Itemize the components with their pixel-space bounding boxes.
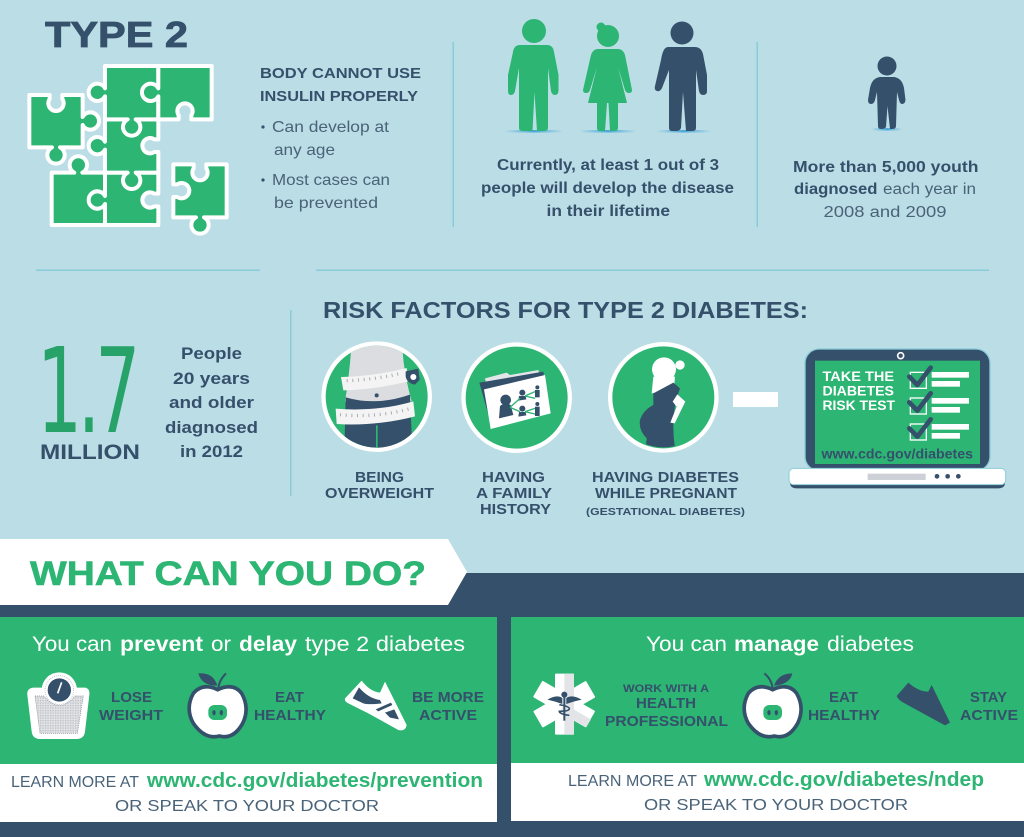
text: people 20 years and older: People: [181, 344, 242, 363]
text: learn more ndep: [568, 769, 984, 814]
icon: scale: [27, 672, 89, 739]
label: eat healthy: [808, 689, 880, 724]
text: one out of three: in their lifetime: [546, 203, 670, 220]
label: lose weight: WEIGHT: [99, 707, 163, 724]
labels: risk factor captions: HISTORY: [480, 502, 551, 518]
text: body cannot use insulin properly: be prevented: [274, 195, 378, 212]
icon: child: [868, 56, 906, 130]
title: type 2: TYPE 2: [45, 14, 188, 55]
panel heading: manage: You can: [646, 633, 727, 656]
text: learn more prevention: LEARN MORE AT: [11, 774, 140, 791]
label: eat healthy: EAT: [275, 689, 304, 706]
icon: laptop risk test: www.cdc.gov/diabetes: [820, 446, 973, 462]
icon: three people: [505, 19, 711, 132]
text: body cannot use insulin properly: Can develop at: [272, 119, 390, 136]
text: body cannot use insulin properly: INSULIN PROPERLY: [260, 88, 418, 105]
labels: risk factor captions: A FAMILY: [476, 486, 552, 502]
label: eat healthy: HEALTHY: [808, 707, 880, 724]
text: youth diagnosed: each year in: [883, 181, 976, 198]
label: be more active: [412, 689, 484, 724]
label: stay active: [960, 689, 1018, 724]
label: eat healthy: EAT: [829, 689, 858, 706]
icon: dark shoe: [897, 683, 950, 725]
labels: risk factor captions: BEING: [355, 470, 404, 486]
labels: risk factor captions: HAVING: [482, 470, 545, 486]
text: youth diagnosed: [793, 159, 978, 221]
text: body cannot use insulin properly: any age: [274, 142, 335, 159]
panel heading: manage: diabetes: [827, 633, 914, 656]
text: body cannot use insulin properly: [260, 65, 421, 212]
icon: pregnant woman: [608, 342, 719, 453]
label: be more active: ACTIVE: [419, 707, 477, 724]
text: one out of three: [481, 157, 734, 220]
icon: overweight: [321, 341, 432, 452]
icon: star of life: [533, 674, 595, 735]
icon: family history: [461, 342, 572, 453]
icon: minus connector: [733, 392, 778, 407]
text: people 20 years and older: and older: [169, 393, 254, 412]
text: one out of three: people will develop the disease: [481, 180, 734, 197]
panel heading: prevent: [32, 633, 465, 656]
text: people 20 years and older: diagnosed: [165, 418, 258, 437]
icon: laptop risk test: RISK TEST: [822, 398, 896, 413]
panel heading: prevent: delay: [239, 633, 297, 656]
text: youth diagnosed: diagnosed: [794, 181, 878, 198]
text: people 20 years and older: [165, 344, 258, 461]
banner: what can you do: [0, 539, 467, 605]
text: body cannot use insulin properly: BODY CANNOT USE: [260, 65, 421, 82]
text: youth diagnosed: 2008 and 2009: [824, 204, 946, 221]
icon: shoe: [345, 681, 407, 730]
text: one out of three: Currently, at least 1 out of 3: [497, 157, 719, 174]
label: work with a health professional: [605, 683, 728, 730]
label: work with a health professional: HEALTH: [636, 695, 696, 712]
labels: risk factor captions: [325, 470, 745, 518]
text: learn more prevention: [11, 770, 483, 815]
banner: what can you do: WHAT CAN YOU DO?: [30, 555, 426, 593]
labels: risk factor captions: (GESTATIONAL DIABETES): [586, 507, 745, 518]
icon: laptop risk test: DIABETES: [822, 384, 894, 398]
text: body cannot use insulin properly: Most cases can: [272, 172, 390, 189]
icon: puzzle pieces: [29, 66, 227, 234]
stat: 1.7 million: MILLION: [40, 441, 140, 464]
icon: apple: [744, 673, 801, 737]
label: stay active: ACTIVE: [960, 707, 1018, 724]
panel: manage: [511, 617, 1024, 821]
text: people 20 years and older: 20 years: [173, 369, 250, 388]
label: eat healthy: HEALTHY: [254, 707, 326, 724]
panel heading: prevent: You can: [32, 633, 112, 656]
label: stay active: STAY: [970, 689, 1007, 706]
icon: laptop risk test: [789, 349, 1006, 488]
heading: risk factors: RISK FACTORS FOR TYPE 2 DIABETES:: [323, 297, 808, 323]
label: eat healthy: [254, 689, 326, 724]
text: learn more ndep: www.cdc.gov/diabetes/ndep: [703, 769, 984, 791]
label: be more active: BE MORE: [412, 689, 484, 706]
text: learn more ndep: OR SPEAK TO YOUR DOCTOR: [644, 797, 908, 814]
panel heading: prevent: type 2 diabetes: [305, 633, 465, 656]
text: youth diagnosed: More than 5,000 youth: [793, 159, 978, 176]
panel heading: prevent: prevent: [120, 633, 203, 656]
icon: apple: [189, 673, 246, 737]
text: learn more ndep: LEARN MORE AT: [568, 773, 698, 790]
labels: risk factor captions: WHILE PREGNANT: [595, 486, 737, 502]
text: people 20 years and older: in 2012: [180, 442, 243, 461]
stat: 1.7 million: 1.7: [37, 323, 140, 460]
panel heading: manage: manage: [734, 633, 819, 656]
icon: laptop risk test: TAKE THE: [822, 369, 894, 384]
background band: what can you do: [0, 573, 1024, 837]
text: learn more prevention: OR SPEAK TO YOUR DOCTOR: [115, 798, 379, 815]
label: lose weight: [99, 689, 163, 724]
label: work with a health professional: PROFESSIONAL: [605, 713, 728, 730]
label: work with a health professional: WORK WITH A: [623, 683, 709, 695]
panel: prevent or delay: [0, 617, 497, 822]
text: learn more prevention: www.cdc.gov/diabetes/prevention: [146, 770, 483, 792]
panel heading: prevent: or: [211, 633, 231, 656]
labels: risk factor captions: HAVING DIABETES: [592, 470, 739, 486]
label: lose weight: LOSE: [111, 689, 152, 706]
panel heading: manage: [646, 633, 914, 656]
labels: risk factor captions: OVERWEIGHT: [325, 486, 434, 502]
